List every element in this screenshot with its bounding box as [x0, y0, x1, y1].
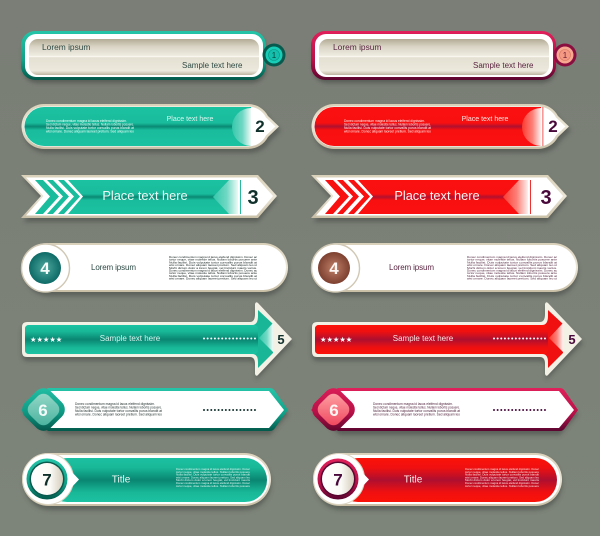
body text: tortor neque, vitae molestie tellus. Nullam lobortis posuere [465, 470, 539, 474]
icon: number 6 diamond [308, 384, 359, 435]
vertical rule [542, 107, 544, 146]
body text: Donec condimentum magna id lacus eleifend dignissim. Donec [465, 467, 539, 471]
label: lorem ipsum: Lorem ipsum [91, 263, 136, 272]
body text: tortor neque, vitae molestie tellus. Nullam lobortis posuere ante [467, 258, 557, 262]
body text: Nulla facilisi. Duis vulputate tortor convallis purus blandit at [169, 260, 257, 264]
body text: wisi ornare. Donec aliquam laoreet pretium. Sed aliquam leo [344, 130, 431, 134]
label: place text: Place text here [167, 116, 213, 123]
body text: tortor neque, vitae molestie tellus. Nullam lobortis posuere [176, 470, 250, 474]
panel: red pill 7 [313, 453, 562, 510]
body text: Sed dictum neque, vitae molestie tellus. Nullam lobortis posuere. [46, 122, 134, 126]
body text: wisi ornare. Donec aliquam laoreet pretium. Sed aliquam leo ut [467, 277, 557, 281]
panel: red banner 1 [311, 31, 576, 83]
body text: Sed dictum neque, vitae molestie tellus. Nullam lobortis posuere. [75, 406, 162, 410]
half circle accent [522, 108, 541, 146]
label: lorem ipsum: Lorem ipsum [333, 42, 381, 52]
title: Title [112, 474, 131, 486]
label: lorem ipsum: Lorem ipsum [389, 263, 434, 272]
stars: ★★★★★ [30, 335, 62, 344]
label: place text: Place text here [102, 188, 188, 203]
body text: Sed dictum neque, vitae molestie tellus. Nullam lobortis posuere. [373, 406, 460, 410]
half circle accent [232, 108, 251, 146]
icon: badge 1: 1 [563, 51, 568, 60]
icon: number 4 circle: 4 [329, 259, 339, 278]
center band [25, 325, 258, 354]
label: sample text: Sample text here [100, 334, 161, 343]
body text: tortor neque, vitae molestie tellus. Nullam lobortis posuere [176, 484, 250, 488]
panel: red banner 2 [312, 104, 571, 153]
body text: Donec condimentum magna id lacus eleifend dignissim. Donec ac [169, 255, 258, 259]
icon: number 6 diamond [18, 384, 69, 435]
label: place text: Place text here [394, 188, 480, 203]
fade diamond [503, 180, 528, 214]
body text: Donec condimentum magna id lacus eleifend dignissim. [344, 119, 425, 123]
dots [204, 409, 255, 411]
fade diamond [213, 180, 238, 214]
icon: number 7 circle [314, 454, 369, 504]
body text: Donec condimentum magna id lacus eleifend dignissim. Donec ac [467, 255, 558, 259]
icon: number 4 circle [312, 244, 360, 292]
label: sample text: Sample text here [473, 61, 534, 70]
icon: number 7 circle: 7 [42, 470, 52, 490]
icon: badge 1 [262, 44, 286, 66]
body text: tortor neque, vitae molestie tellus. Nullam lobortis posuere ante [169, 271, 257, 275]
chevron stripes [35, 180, 80, 214]
icon: number 6 diamond: 6 [329, 401, 339, 420]
panel: red hex banner 6 [308, 384, 578, 435]
panel: teal pill 4 [22, 243, 288, 296]
body text: Donec condimentum magna id lacus eleifend dignissim. Donec [465, 481, 539, 485]
body text: Donec condimentum magna id lacus eleifend dignissim. [75, 402, 155, 406]
number 5: 5 [568, 332, 576, 347]
icon: badge 1 [554, 44, 576, 66]
fade diamond [549, 323, 563, 352]
icon: number 7 circle [22, 454, 79, 504]
body text: tortor neque, vitae molestie tellus. Nullam lobortis posuere ante [169, 258, 257, 262]
body text [75, 402, 162, 416]
body text [465, 467, 540, 488]
body text: tortor neque, vitae molestie tellus. Nullam lobortis posuere [465, 484, 539, 488]
body text: Morbi dictum dolor a lorem feugiat, vel tincidunt mauris varius. [169, 266, 257, 270]
body text [46, 119, 134, 134]
body text [467, 255, 558, 281]
body text: Nulla facilisi. Duis vulputate tortor convallis purus blandit at [75, 409, 162, 413]
icon: number 4 circle [22, 244, 70, 292]
body text: Donec condimentum magna id lacus eleifend dignissim. Donec ac [169, 268, 258, 272]
icon: number 7 circle: 7 [333, 470, 343, 490]
body text: Nulla facilisi. Duis vulputate tortor convallis purus blandit [465, 473, 539, 477]
body text: Morbi dictum dolor a lorem feugiat, vel tincidunt mauris [465, 478, 540, 482]
body text: Donec condimentum magna id lacus eleifend dignissim. [46, 119, 127, 123]
body text: wisi ornare. Donec aliquam laoreet pretium. Sed aliquam leo ut [169, 277, 257, 281]
stars: ★★★★★ [320, 335, 352, 344]
body text: Morbi dictum dolor a lorem feugiat, vel tincidunt mauris [176, 478, 251, 482]
body text: Donec condimentum magna id lacus eleifend dignissim. [373, 402, 453, 406]
body text: tortor neque, vitae molestie tellus. Nullam lobortis posuere ante [467, 271, 557, 275]
body text: Nulla facilisi. Duis vulputate tortor convallis purus blandit [176, 473, 250, 477]
dots [494, 338, 545, 340]
icon: number 4 circle: 4 [40, 259, 50, 278]
label: lorem ipsum: Lorem ipsum [42, 42, 90, 52]
number 2: 2 [548, 117, 558, 136]
body text: Morbi dictum dolor a lorem feugiat, vel tincidunt mauris varius. [467, 266, 557, 270]
body text: wisi ornare. Donec aliquam laoreet pretium. Sed aliquam leo ut [169, 263, 257, 267]
body text: wisi ornare. Donec aliquam laoreet pretium. Sed aliquam leo [176, 475, 250, 479]
panel: red arrow 5 [312, 302, 583, 380]
label: sample text: Sample text here [182, 61, 243, 70]
icon: badge 1: 1 [272, 51, 277, 60]
dots [204, 338, 255, 340]
body text [176, 467, 251, 488]
body text: wisi ornare. Donec aliquam laoreet pretium. Sed aliquam leo [373, 412, 460, 416]
body text: wisi ornare. Donec aliquam laoreet pretium. Sed aliquam leo ut [467, 263, 557, 267]
body text: Nulla facilisi. Duis vulputate tortor convallis purus blandit at [467, 274, 557, 278]
panel: teal arrow 5 [22, 302, 293, 380]
chevron stripes [325, 180, 370, 214]
body text: Nulla facilisi. Duis vulputate tortor convallis purus blandit at [467, 260, 557, 264]
number 2: 2 [255, 117, 265, 136]
body text [169, 255, 258, 281]
icon: number 6 diamond: 6 [38, 401, 48, 420]
panel: teal banner 1 [21, 31, 286, 83]
body text: Donec condimentum magna id lacus eleifend dignissim. Donec [176, 481, 250, 485]
label: place text: Place text here [462, 116, 508, 123]
panel: red ribbon 3 [311, 175, 567, 222]
title: Title [404, 474, 423, 486]
body text: Nulla facilisi. Duis vulputate tortor convallis purus blandit at [46, 126, 134, 130]
number 5: 5 [277, 332, 285, 347]
center band [315, 325, 548, 354]
number 3: 3 [540, 187, 552, 209]
body text: Nulla facilisi. Duis vulputate tortor convallis purus blandit at [344, 126, 431, 130]
body text [344, 119, 431, 134]
body text: wisi ornare. Donec aliquam laoreet pretium. Sed aliquam leo [46, 130, 134, 134]
panel: teal hex banner 6 [18, 384, 288, 435]
body text: Sed dictum neque, vitae molestie tellus. Nullam lobortis posuere. [344, 122, 431, 126]
body text: Donec condimentum magna id lacus eleifend dignissim. Donec [176, 467, 250, 471]
panel: teal pill 7 [22, 453, 271, 510]
body text [373, 402, 460, 416]
panel: teal banner 2 [22, 104, 281, 153]
fade diamond [259, 323, 273, 352]
label: sample text: Sample text here [393, 334, 454, 343]
body text: Donec condimentum magna id lacus eleifend dignissim. Donec ac [467, 268, 558, 272]
body text: wisi ornare. Donec aliquam laoreet pretium. Sed aliquam leo [75, 412, 162, 416]
panel: teal ribbon 3 [21, 175, 277, 222]
body text: wisi ornare. Donec aliquam laoreet pretium. Sed aliquam leo [465, 475, 539, 479]
body text: Nulla facilisi. Duis vulputate tortor convallis purus blandit at [169, 274, 257, 278]
dots [494, 409, 545, 411]
panel: red pill 4 [312, 243, 578, 296]
number 3: 3 [247, 187, 259, 209]
body text: Nulla facilisi. Duis vulputate tortor convallis purus blandit at [373, 409, 460, 413]
